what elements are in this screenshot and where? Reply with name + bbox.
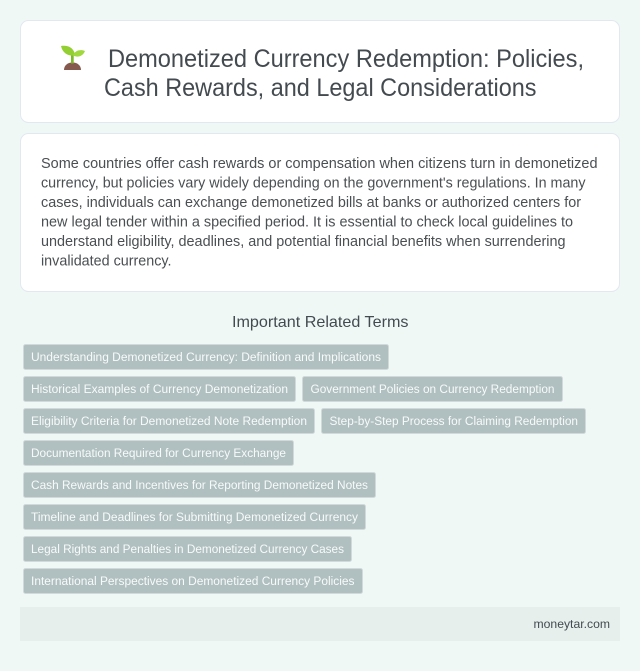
heading: important related terms: Important Related Terms [232,314,408,331]
text block: description: cases, individuals can exchange demonetized bills at banks or authorized centers for [41,194,581,211]
tag: International Perspectives on Demonetized Currency Policies [31,574,354,588]
tag [24,408,314,434]
text block: description: understand eligibility, deadlines, and potential financial benefits when surrendering [41,233,566,250]
panel: description card [20,134,620,292]
tag [24,440,294,466]
text block: description: currency, but policies vary widely depending on the government's regulations. In many [41,174,586,192]
tag: Cash Rewards and Incentives for Reporting Demonetized Notes [31,478,368,492]
title: Cash Rewards, and Legal Considerations [104,75,536,102]
tag: Legal Rights and Penalties in Demonetized Currency Cases [31,542,344,556]
tag [24,344,388,370]
tag [24,472,376,498]
tag [24,376,296,402]
tag: Timeline and Deadlines for Submitting Demonetized Currency [31,510,359,524]
title: Demonetized Currency Redemption: Policies, [108,46,584,73]
tag [24,536,352,562]
footer source text: moneytar.com [534,617,610,631]
text block: description: invalidated currency. [41,252,172,270]
text block: description: Some countries offer cash rewards or compensation when citizens turn in demonetized [41,155,598,172]
tag [24,504,366,530]
footer [20,607,620,641]
tag: Documentation Required for Currency Exchange [31,446,286,460]
tag [302,376,562,402]
tag: Eligibility Criteria for Demonetized Note Redemption [31,414,307,428]
tag: Government Policies on Currency Redemption [310,382,554,396]
tag: Step-by-Step Process for Claiming Redemption [330,414,578,428]
panel: related term tags [24,344,586,594]
panel: title card [20,20,620,122]
title [104,46,584,102]
tag [322,408,586,434]
tag [24,568,362,594]
icon: sprout [61,46,85,70]
tag: Understanding Demonetized Currency: Definition and Implications [31,350,381,364]
text block: description: new legal tender within a specified period. It is essential to check local guidelines to [41,214,573,230]
tag: Historical Examples of Currency Demonetization [31,382,288,396]
text block: description [41,155,598,270]
